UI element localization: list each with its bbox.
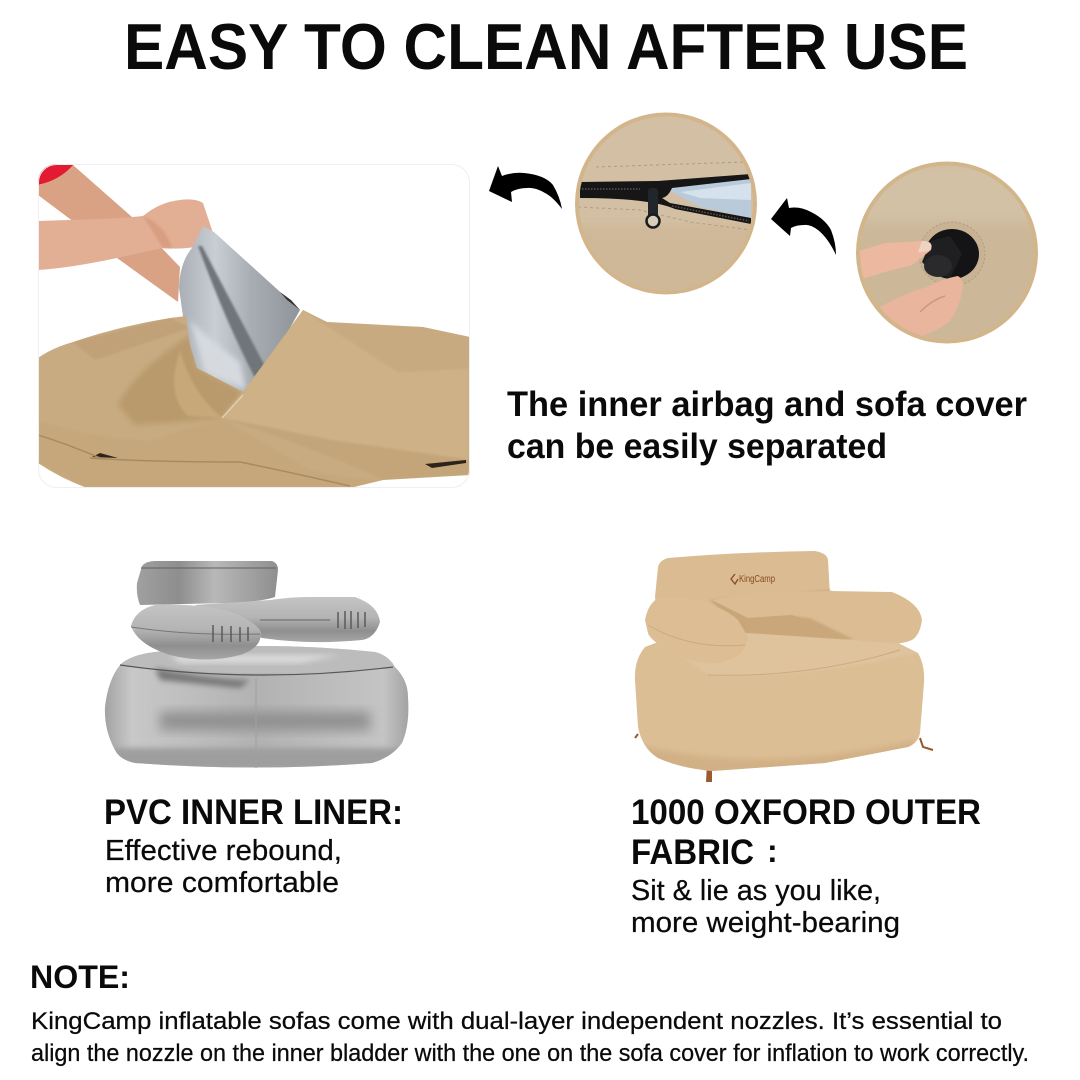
stitching [596,162,744,167]
note heading: NOTE: [30,959,130,995]
zipper pull [648,188,658,215]
blue lining [665,178,751,218]
text block: 1000 Oxford outer fabric: FABRIC [631,833,754,872]
sleeve [38,164,74,185]
text block: 1000 Oxford outer fabric: 1000 OXFORD OUTER [631,793,981,832]
front arm and hand [38,199,213,270]
image: silver PVC inner liner [100,561,415,775]
text block: PVC inner liner: PVC INNER LINER: [104,793,403,832]
image: tan Oxford outer sofa [630,551,933,782]
logo: KingCamp [739,574,775,585]
note text: align the nozzle on the inner bladder with the one on the sofa cover for inflation to work correctly. [31,1040,1029,1067]
icon: zipper circle [570,112,760,305]
text block: PVC inner liner [104,793,403,899]
caption: separation: The inner airbag and sofa cover [507,385,1027,424]
right arm [712,591,922,644]
inner shadow [710,590,860,640]
text block: 1000 Oxford outer fabric: Sit & lie as you like, [631,875,881,907]
silver bag [179,226,300,395]
note text [31,1008,1029,1067]
left arm [131,605,261,660]
photo: separating airbag from sofa cover [38,164,470,490]
icon: nozzle circle [856,162,1038,344]
left arm [645,597,748,663]
legs and straps [706,764,712,782]
nozzle [925,229,979,279]
title: EASY TO CLEAN AFTER USE [124,10,968,83]
text block: PVC inner liner: Effective rebound, [105,835,342,867]
text block: PVC inner liner: more comfortable [105,867,339,899]
stitched nozzle patch [919,222,985,286]
arrow: toward zipper [771,198,836,255]
rear arm [38,165,180,302]
arrow: toward photo [489,166,562,209]
logo [731,574,775,585]
text block: 1000 Oxford outer fabric: more weight-bearing [631,907,900,939]
text block: 1000 Oxford outer fabric: : [767,833,778,869]
text block: 1000 Oxford outer fabric [631,793,981,939]
fingers [856,241,931,279]
backrest [655,551,830,640]
right arm [195,597,380,642]
caption: separation [507,385,1027,466]
base [630,630,930,775]
base [104,646,408,768]
zipper tape [580,174,751,224]
cover fabric [38,305,470,490]
note text: KingCamp inflatable sofas come with dual-layer independent nozzles. It’s essential to [31,1008,1002,1035]
backrest [137,561,278,605]
caption: separation: can be easily separated [507,427,887,466]
